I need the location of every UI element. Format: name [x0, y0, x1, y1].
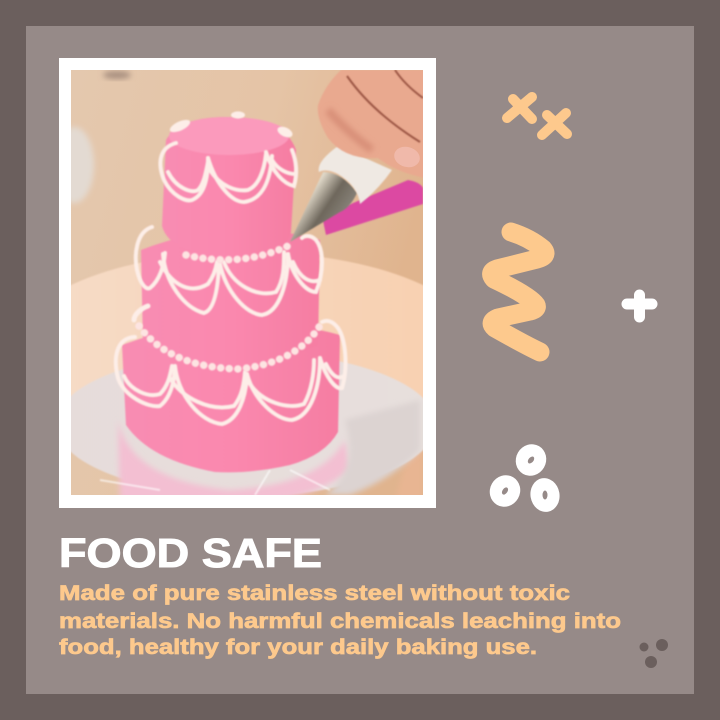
icon: three dark dots [640, 639, 668, 668]
peach turntable disc [71, 257, 423, 398]
top tier swags [160, 143, 208, 200]
silver cake board [71, 361, 423, 495]
white coupler [319, 146, 392, 204]
middle tier swags [136, 227, 165, 288]
heading: FOOD SAFE [59, 530, 322, 576]
icon: peach crosses [507, 97, 567, 135]
photo: white frame with piped pink cake [59, 58, 436, 508]
bead strings [139, 246, 322, 369]
body text: Made of pure stainless steel without toxic [59, 582, 570, 605]
middle tier [140, 233, 320, 338]
body text: materials. No harmful chemicals leaching into [59, 610, 621, 633]
hand [318, 70, 425, 178]
fingernail [394, 146, 420, 168]
top rosettes [168, 111, 294, 139]
icon: white plus [627, 295, 652, 317]
bottom tier swags [116, 337, 175, 406]
table background [71, 70, 423, 495]
glass blur at left edge [71, 125, 96, 205]
body text: food, healthy for your daily baking use. [59, 636, 537, 659]
icon: three white donuts [484, 439, 562, 514]
icon: peach zigzag squiggle [492, 232, 545, 352]
white piping on cake [116, 143, 345, 424]
pink fondant cake [122, 117, 340, 472]
dark blur at top [103, 71, 131, 79]
pink piping bag [322, 180, 423, 235]
top tier [162, 136, 297, 240]
steel piping nozzle [290, 172, 357, 242]
bottom tier [122, 322, 340, 472]
body text [59, 582, 621, 659]
table corner bottom right [395, 400, 423, 500]
